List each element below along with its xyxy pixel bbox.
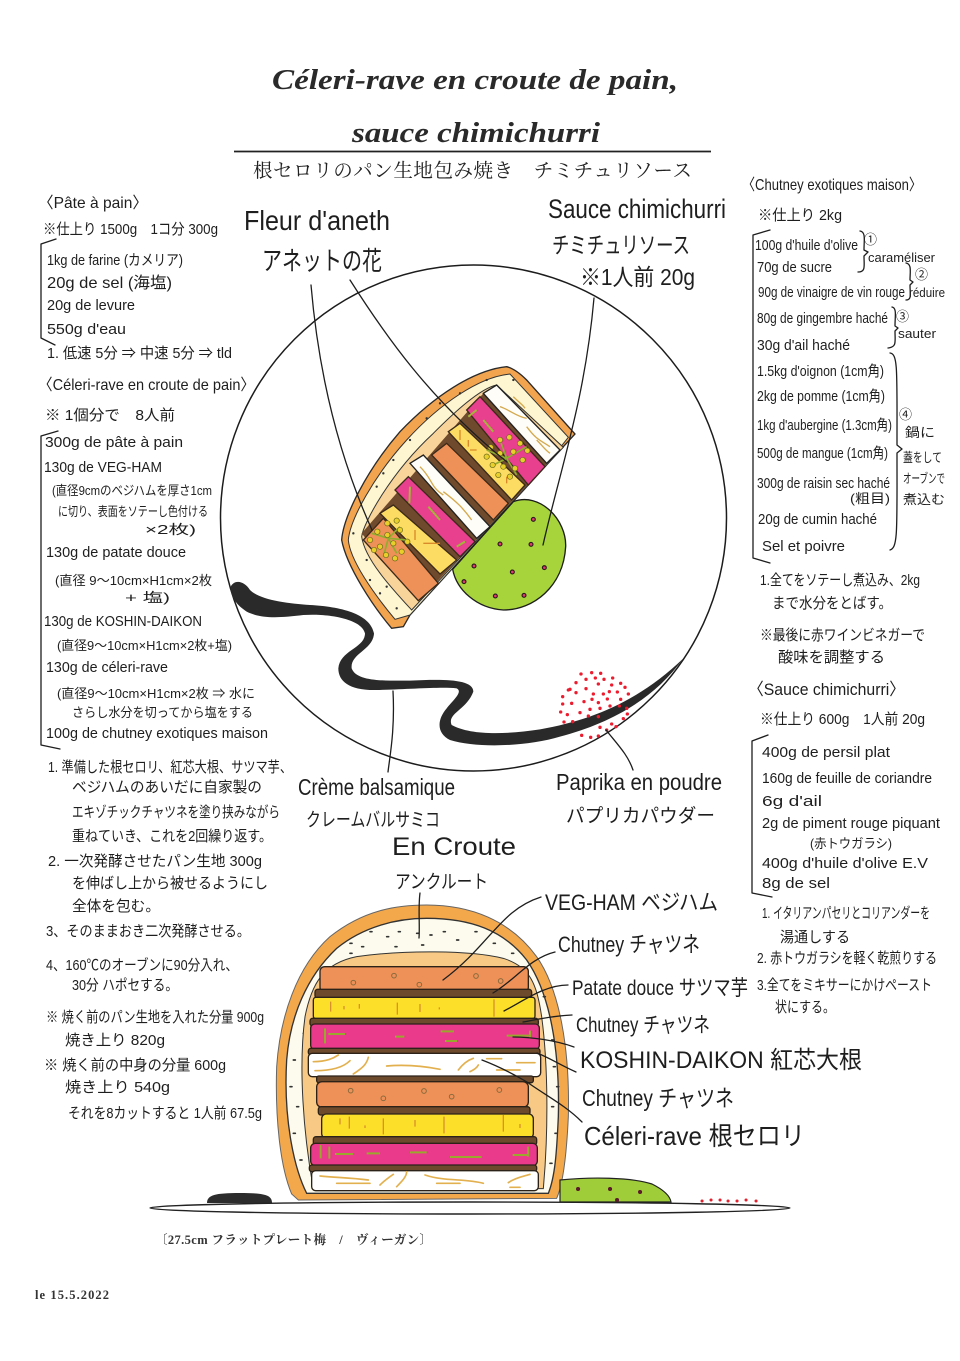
crumb speckle (290, 932, 559, 1187)
block: chutney cooking braces: réduire (909, 285, 945, 300)
block: Céleri-rave ingredients: (直径9〜10cm×H1cm×2枚 ⇒ 水に (57, 686, 255, 701)
daikon marks (321, 1028, 530, 1159)
label: Sauce chimichurri: ※1人前 20g (580, 264, 695, 290)
label: En Croute (392, 833, 516, 893)
label: layer names: KOSHIN-DAIKON 紅芯大根 (580, 1047, 862, 1074)
title: sauce chimichurri (351, 118, 600, 149)
label: Crème balsamique (298, 774, 455, 831)
block: assembly steps: 重ねていき、これを2回繰り返す。 (72, 828, 272, 845)
block: sauce chimichurri recipe: 160g de feuille de coriandre (762, 770, 932, 787)
block: sauce chimichurri recipe: 6g d'ail (762, 793, 822, 810)
block: assembly steps (46, 759, 292, 994)
label: Sauce chimichurri: チミチュリソース (552, 232, 690, 258)
block: Pâte à pain: 〈Pâte à pain〉 (38, 195, 148, 212)
block: chutney ingredients: 100g d'huile d'olive (755, 237, 858, 254)
block: chutney ingredients: (粗目) (850, 491, 890, 506)
block: Pâte à pain: ※仕上り 1500g 1コ分 300g (43, 221, 218, 238)
block: assembly steps: を伸ばし上から被せるようにし (72, 875, 268, 892)
block: Céleri-rave ingredients: (直径9cmのベジハムを厚さ1cm (52, 483, 212, 498)
block: chutney ingredients: 80g de gingembre haché (757, 310, 888, 327)
block: weight notes: 焼き上り 820g (65, 1032, 165, 1049)
tan interior (302, 952, 547, 1189)
block: chutney steps: ※最後に赤ワインビネガーで (760, 627, 925, 644)
crumb (286, 918, 559, 1193)
block: Céleri-rave ingredients: ×2枚) (145, 522, 196, 537)
block: chutney ingredients: 70g de sucre (757, 259, 832, 276)
block: assembly steps: 全体を包む。 (72, 898, 160, 915)
block: chutney ingredients: 300g de raisin sec haché (757, 475, 890, 492)
label: Paprika en poudre (556, 769, 722, 827)
block: chutney cooking braces: 煮込む (903, 492, 945, 507)
label: layer names: VEG-HAM ベジハム (545, 890, 718, 915)
block: Pâte à pain: 1kg de farine (カメリア) (47, 252, 183, 269)
block: assembly steps: 4、160℃のオーブンに90分入れ、 (46, 956, 238, 974)
block: weight notes (44, 1009, 264, 1122)
label: Fleur d'aneth (244, 205, 390, 276)
plate caption: 〔27.5cm フラットプレート梅 / ヴィーガン〕 (155, 1232, 432, 1247)
celeri marks (313, 1055, 535, 1187)
block: assembly steps: 3、そのままおき二次発酵させる。 (46, 923, 250, 940)
block: Pâte à pain: 550g d'eau (47, 321, 126, 338)
plate side view (150, 1178, 790, 1214)
block: chutney ingredients: Sel et poivre (762, 538, 845, 555)
plate labels (244, 194, 862, 1151)
subtitle: 根セロリのパン生地包み焼き チミチュリソース (253, 160, 692, 182)
block: sauce chimichurri recipe: 8g de sel (762, 875, 830, 892)
label: Fleur d'aneth: アネットの花 (262, 246, 382, 276)
block: sauce chimichurri recipe: 400g de persil plat (762, 744, 891, 761)
block: chutney cooking braces: 蓋をして (903, 450, 942, 465)
block: chutney steps: 酸味を調整する (778, 649, 885, 666)
block: Céleri-rave ingredients: + 塩) (125, 590, 170, 605)
block: weight notes: ※ 焼く前の中身の分量 600g (44, 1057, 226, 1074)
label: En Croute: En Croute (392, 833, 516, 861)
block: Céleri-rave ingredients: 100g de chutney exotiques maison (46, 725, 268, 742)
block: Céleri-rave ingredients: 130g de céleri-rave (46, 659, 168, 676)
balsamic cream sauce stroke (231, 582, 683, 745)
block: Céleri-rave ingredients: に切り、表面をソテーし色付ける (58, 504, 208, 519)
label: layer names (545, 890, 862, 1151)
sliced croute top view (342, 367, 575, 628)
block: sauce chimichurri recipe: (赤トウガラシ) (810, 836, 892, 851)
block: chutney steps: まで水分をとばす。 (772, 595, 892, 612)
block: chutney ingredients: 500g de mangue (1cm角) (757, 445, 888, 462)
label: layer names: Chutney チャツネ (576, 1014, 710, 1037)
date: le 15.5.2022 (35, 1288, 109, 1302)
block: chutney cooking braces: caraméliser (868, 250, 936, 265)
label: Sauce chimichurri (548, 194, 726, 290)
label: layer names: Patate douce サツマ芋 (572, 977, 748, 1000)
block: chutney cooking braces: 鍋に (905, 425, 935, 440)
label: Fleur d'aneth: Fleur d'aneth (244, 205, 390, 236)
block: chutney steps: 1.全てをソテーし煮込み、2kg (760, 572, 920, 589)
paprika powder dots (561, 673, 628, 737)
block: chutney ingredients: 2kg de pomme (1cm角) (757, 388, 885, 405)
block: chutney ingredients: 20g de cumin haché (758, 511, 877, 528)
block: sauce chimichurri recipe: ※仕上り 600g 1人前 20g (760, 711, 925, 728)
panel: croute cross section (276, 905, 569, 1200)
label: Paprika en poudre: パプリカパウダー (566, 805, 715, 827)
block: chutney ingredients: 〈Chutney exotiques maison〉 (742, 177, 922, 194)
block: Céleri-rave ingredients: 130g de VEG-HAM (44, 459, 162, 476)
label: Paprika en poudre: Paprika en poudre (556, 769, 722, 795)
title: Céleri-rave en croute de pain, (272, 65, 678, 96)
block: assembly steps: 1. 準備した根セロリ、紅芯大根、サツマ芋、 (48, 759, 292, 776)
block: chutney ingredients: 30g d'ail haché (757, 337, 850, 354)
block: Céleri-rave ingredients: さらし水分を切ってから塩をする (72, 705, 253, 720)
block: assembly steps: 30分 ハポセする。 (72, 977, 178, 994)
block: weight notes: ※ 焼く前のパン生地を入れた分量 900g (46, 1009, 264, 1026)
block: chutney cooking braces: sauter (898, 326, 937, 341)
block: assembly steps: ベジハムのあいだに自家製の (72, 779, 262, 796)
block: Pâte à pain: 20g de sel (海塩) (47, 274, 172, 292)
ham specks (348, 973, 503, 1101)
block: sauce chimichurri recipe (748, 680, 941, 1016)
label: Crème balsamique: Crème balsamique (298, 774, 455, 800)
title (234, 65, 711, 152)
block: Céleri-rave ingredients (38, 377, 268, 749)
sweet potato marks (331, 999, 520, 1134)
block: Céleri-rave ingredients: 130g de patate douce (46, 544, 186, 561)
block: sauce chimichurri recipe: 湯通しする (780, 929, 850, 946)
block: chutney cooking braces: ③ (896, 309, 909, 324)
block: Céleri-rave ingredients: 130g de KOSHIN-DAIKON (44, 613, 202, 630)
block: Céleri-rave ingredients: ※ 1個分で 8人前 (45, 407, 175, 424)
block: Pâte à pain: 20g de levure (47, 297, 135, 314)
block: chutney cooking braces: ② (915, 267, 928, 282)
block: chutney cooking braces: ① (864, 232, 877, 247)
crust (276, 905, 569, 1200)
leader lines (311, 280, 633, 1122)
block: Céleri-rave ingredients: 〈Céleri-rave en croute de pain〉 (38, 377, 255, 394)
block: chutney ingredients: 1kg d'aubergine (1.3cm角) (757, 417, 892, 434)
block: chutney ingredients: 90g de vinaigre de vin rouge (758, 284, 905, 301)
label: layer names: Céleri-rave 根セロリ (584, 1121, 805, 1151)
block: Pâte à pain (38, 195, 232, 362)
block: Céleri-rave ingredients: (直径 9〜10cm×H1cm×2枚 (55, 573, 212, 588)
block: assembly steps: 2. 一次発酵させたパン生地 300g (48, 853, 262, 870)
label: En Croute: アンクルート (395, 871, 488, 893)
block: Céleri-rave ingredients: (直径9〜10cm×H1cm×2枚+塩) (57, 638, 232, 653)
block: chutney ingredients: 1.5kg d'oignon (1cm角) (757, 363, 884, 380)
block: sauce chimichurri recipe: 状にする。 (775, 999, 835, 1016)
panel: right recipe column (742, 177, 945, 1016)
block: chutney cooking braces: ④ (899, 407, 912, 422)
green sauce chimichurri (453, 500, 566, 610)
block: sauce chimichurri recipe: 〈Sauce chimichurri〉 (748, 680, 905, 699)
block: chutney cooking braces (858, 231, 945, 550)
block: Pâte à pain: 1. 低速 5分 ⇒ 中速 5分 ⇒ tld (47, 345, 232, 362)
block: chutney ingredients (742, 177, 922, 563)
block: sauce chimichurri recipe: 2g de piment rouge piquant (762, 815, 941, 832)
block: assembly steps: エキゾチックチャツネを塗り挟みながら (72, 804, 280, 821)
label: layer names: Chutney チャツネ (582, 1085, 734, 1111)
dill flower (367, 435, 530, 561)
block: chutney ingredients: ※仕上り 2kg (758, 207, 842, 224)
layers (308, 967, 541, 1191)
block: Céleri-rave ingredients: 300g de pâte à pain (45, 434, 183, 451)
block: sauce chimichurri recipe: 400g d'huile d'olive E.V (762, 855, 928, 872)
label: Crème balsamique: クレームバルサミコ (306, 809, 440, 831)
block: weight notes: 焼き上り 540g (65, 1079, 170, 1096)
label: Sauce chimichurri: Sauce chimichurri (548, 194, 726, 224)
panel: left recipe column (38, 195, 292, 1122)
plate circle (220, 265, 726, 771)
block: weight notes: それを8カットすると 1人前 67.5g (68, 1105, 262, 1122)
panel: plate top view (220, 265, 726, 771)
block: chutney steps (760, 572, 925, 666)
label: layer names: Chutney チャツネ (558, 932, 700, 957)
